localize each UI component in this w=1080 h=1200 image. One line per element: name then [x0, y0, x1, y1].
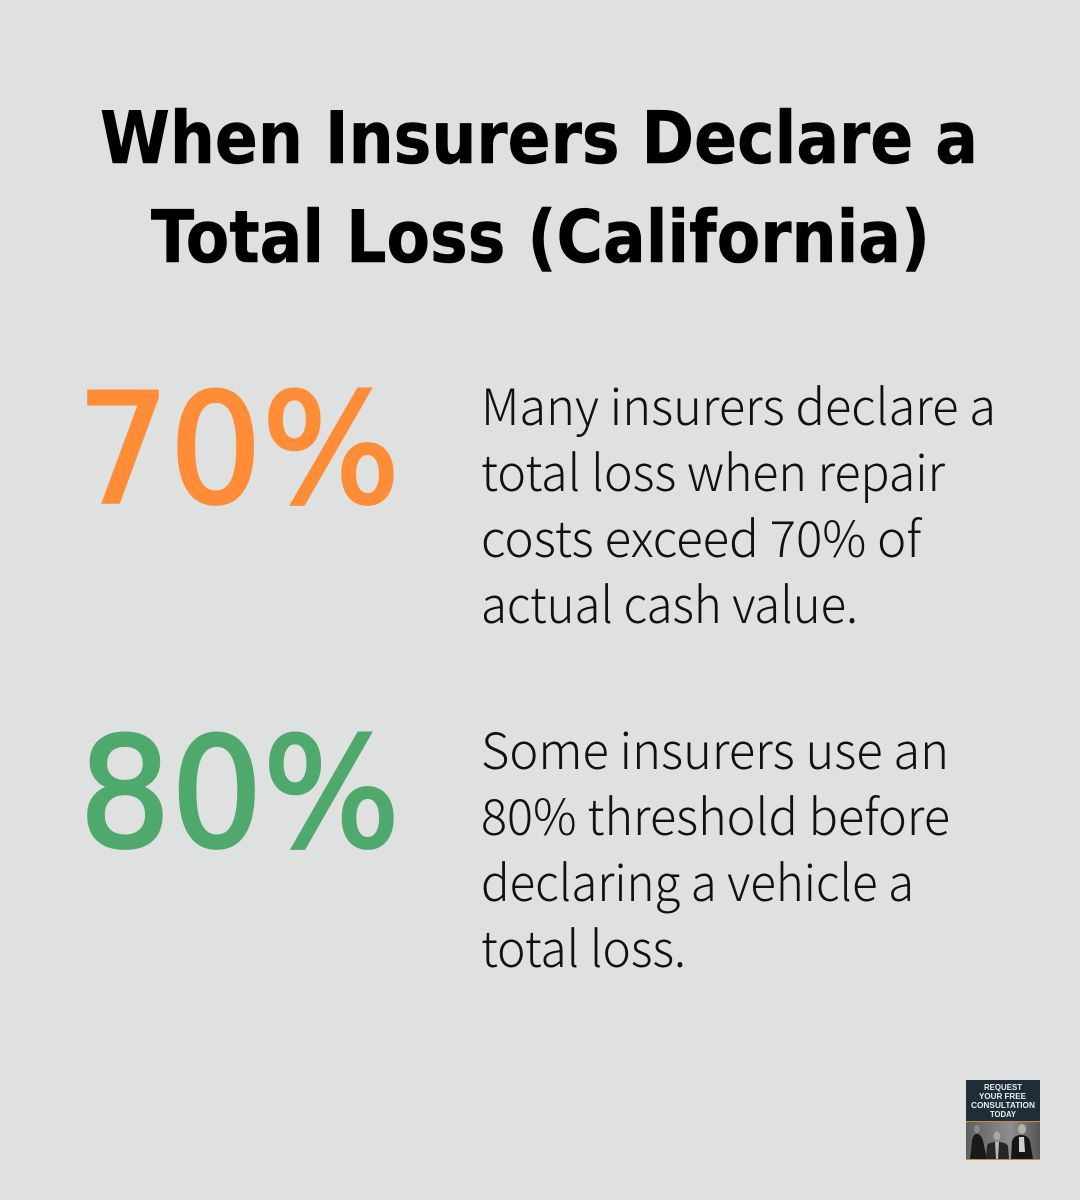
badge: request your free consultation: YOUR FREE — [979, 1092, 1027, 1101]
text: 70% description: Many insurers declare a — [481, 368, 996, 440]
text: 70% description — [481, 368, 996, 638]
text: 70% description: actual cash value. — [481, 566, 858, 638]
badge: request your free consultation: TODAY — [990, 1110, 1017, 1119]
stat: 80%: 80% — [79, 705, 400, 882]
text: 80% description: Some insurers use an — [481, 712, 949, 784]
centre person — [986, 1132, 1009, 1160]
text: 80% description: declaring a vehicle a — [481, 844, 914, 916]
text: 80% description: total loss. — [481, 910, 686, 982]
title: Total Loss (California) — [151, 195, 930, 279]
stat: 70%: 70% — [77, 361, 400, 538]
text: 80% description — [481, 712, 950, 982]
text: 70% description: total loss when repair — [481, 434, 946, 506]
left person — [970, 1125, 987, 1159]
right person — [1011, 1124, 1033, 1159]
text: 80% description: 80% threshold before — [481, 778, 950, 850]
badge: request your free consultation — [966, 1080, 1040, 1160]
badge: request your free consultation: REQUEST — [984, 1083, 1022, 1092]
text: 70% description: costs exceed 70% of — [481, 500, 923, 572]
badge: request your free consultation: CONSULTATION — [971, 1101, 1035, 1110]
title — [100, 96, 978, 279]
title: When Insurers Declare a — [100, 96, 978, 180]
